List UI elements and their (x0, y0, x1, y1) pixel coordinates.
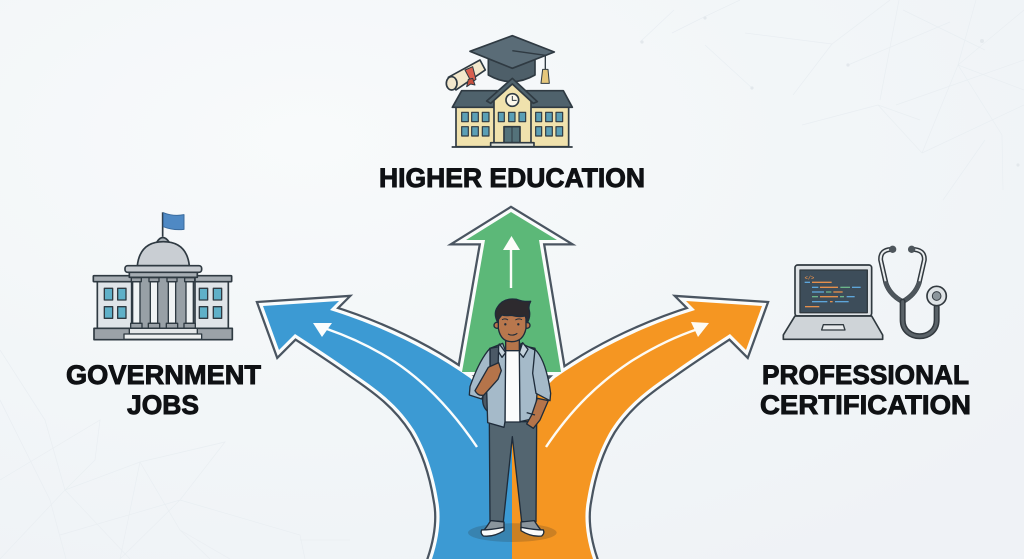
strap (490, 347, 499, 377)
heading: professional certification: CERTIFICATION (760, 390, 971, 420)
icon: laptop with code: </> (805, 275, 814, 281)
heading: government jobs: JOBS (127, 390, 199, 420)
heading: professional certification (760, 360, 971, 420)
shadow (468, 523, 557, 542)
arrows: three diverging paths (263, 212, 762, 559)
arrow: blue left (263, 301, 513, 559)
heading: higher education: HIGHER EDUCATION (379, 163, 645, 193)
backpack (483, 347, 499, 413)
left arm (469, 348, 490, 399)
icon: school building (452, 78, 573, 147)
face (504, 323, 506, 325)
heading: government jobs (66, 360, 261, 420)
arrow: green up (462, 212, 561, 372)
heading: professional certification: PROFESSIONAL (762, 360, 969, 390)
icon: diploma scroll (446, 60, 485, 90)
right arm (533, 349, 551, 401)
arrow: orange right (512, 301, 762, 559)
heading: government jobs: GOVERNMENT (66, 360, 261, 390)
icon: stethoscope (881, 246, 946, 336)
person: student with backpack (468, 299, 557, 542)
icon: government building (93, 212, 232, 340)
head (494, 322, 500, 328)
icon: graduation cap (470, 36, 554, 83)
hair (495, 299, 531, 323)
shoes (481, 521, 544, 536)
icon: graduation cap, diploma and university building (446, 36, 573, 147)
icon: flag (163, 212, 184, 237)
neck and tee (506, 337, 519, 352)
shirt (487, 343, 506, 427)
trousers (489, 422, 537, 522)
icon: laptop with code (783, 265, 883, 339)
